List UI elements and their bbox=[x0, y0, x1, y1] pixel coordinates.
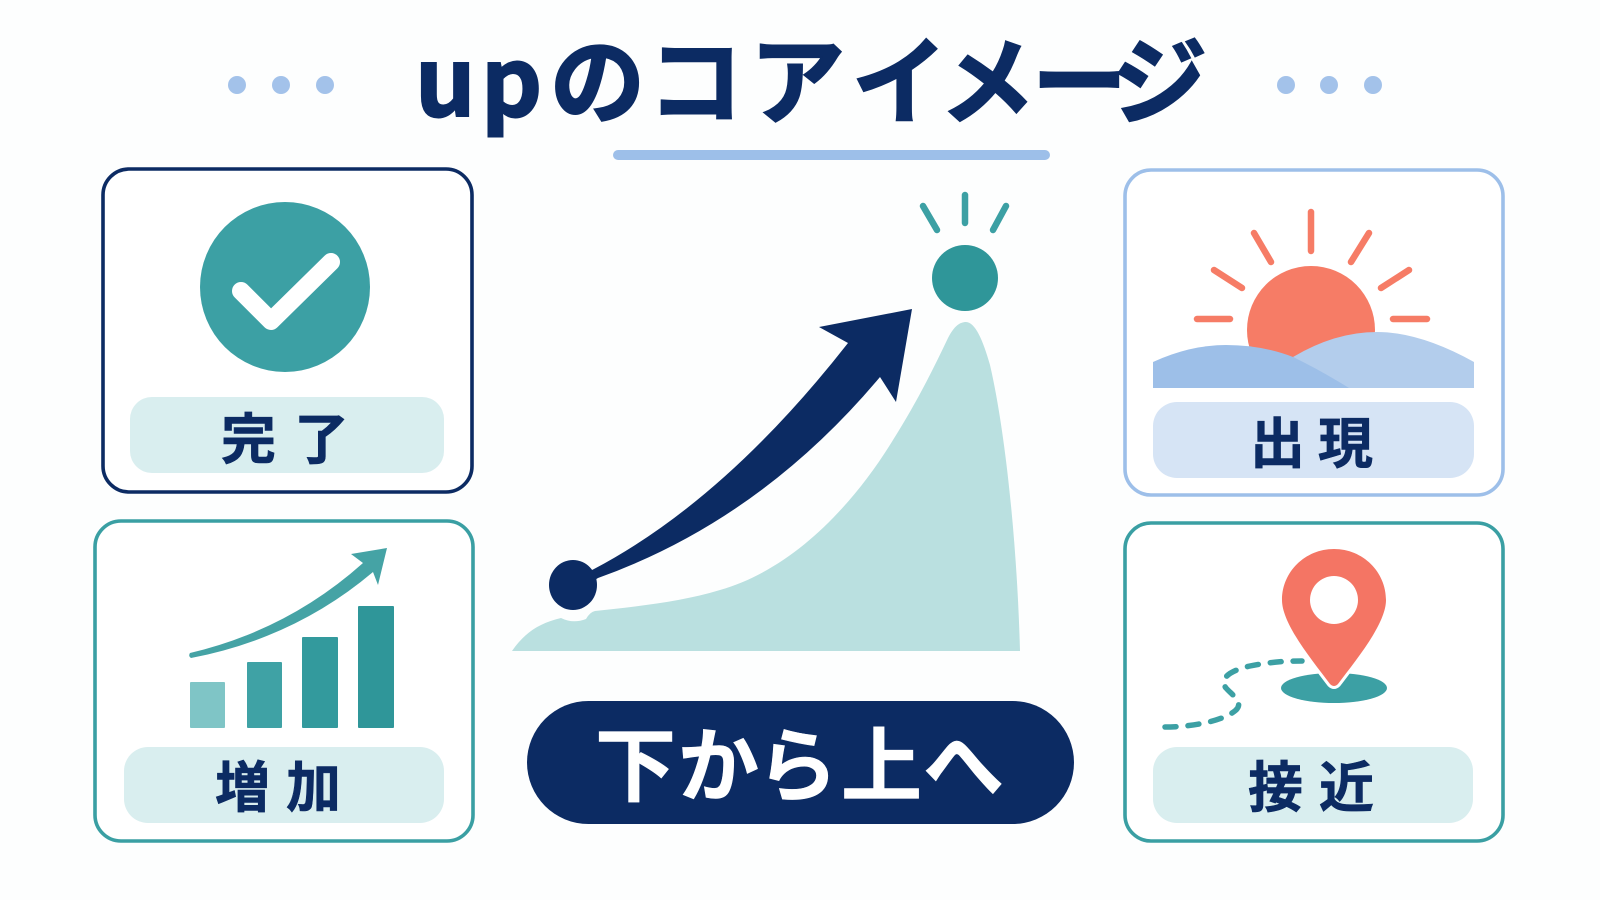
icon: bar chart bbox=[190, 606, 394, 728]
chart: rising mountain bbox=[512, 195, 1020, 651]
mountain bbox=[512, 322, 1020, 651]
icon: map pin bbox=[1282, 549, 1386, 686]
label: 接近 bbox=[1153, 743, 1473, 823]
peak dot bbox=[932, 245, 998, 311]
label: 完了 bbox=[130, 395, 444, 475]
dots: right bbox=[1277, 76, 1382, 94]
icon: growth arrow bbox=[189, 548, 387, 658]
start dot bbox=[549, 560, 597, 610]
icon: dashed route bbox=[1165, 661, 1302, 727]
label: 出現: 出現 bbox=[1250, 399, 1373, 479]
label: 完了: 完了 bbox=[221, 395, 349, 475]
label: 増加 bbox=[124, 743, 444, 823]
panel: 接近 bbox=[1125, 523, 1503, 841]
callout: 下から上へ: 下から上へ bbox=[595, 702, 1004, 819]
peak rays bbox=[923, 195, 1006, 230]
title underline bbox=[613, 150, 1050, 160]
icon: check circle bbox=[200, 202, 370, 372]
panel: 増加 bbox=[95, 521, 473, 841]
icon: pin hole bbox=[1310, 576, 1358, 624]
icon: ground ellipse bbox=[1281, 673, 1387, 703]
panel: 完了 bbox=[103, 169, 472, 492]
label: 接近: 接近 bbox=[1248, 743, 1374, 823]
title: upのコアイメージ bbox=[415, 7, 1207, 144]
icon: sunrise bbox=[1153, 212, 1474, 394]
label: 増加: 増加 bbox=[215, 743, 341, 823]
panel: 出現 bbox=[1125, 170, 1503, 495]
dots: left bbox=[228, 76, 334, 94]
label: 出現 bbox=[1153, 399, 1474, 479]
rising arrow bbox=[590, 309, 912, 583]
